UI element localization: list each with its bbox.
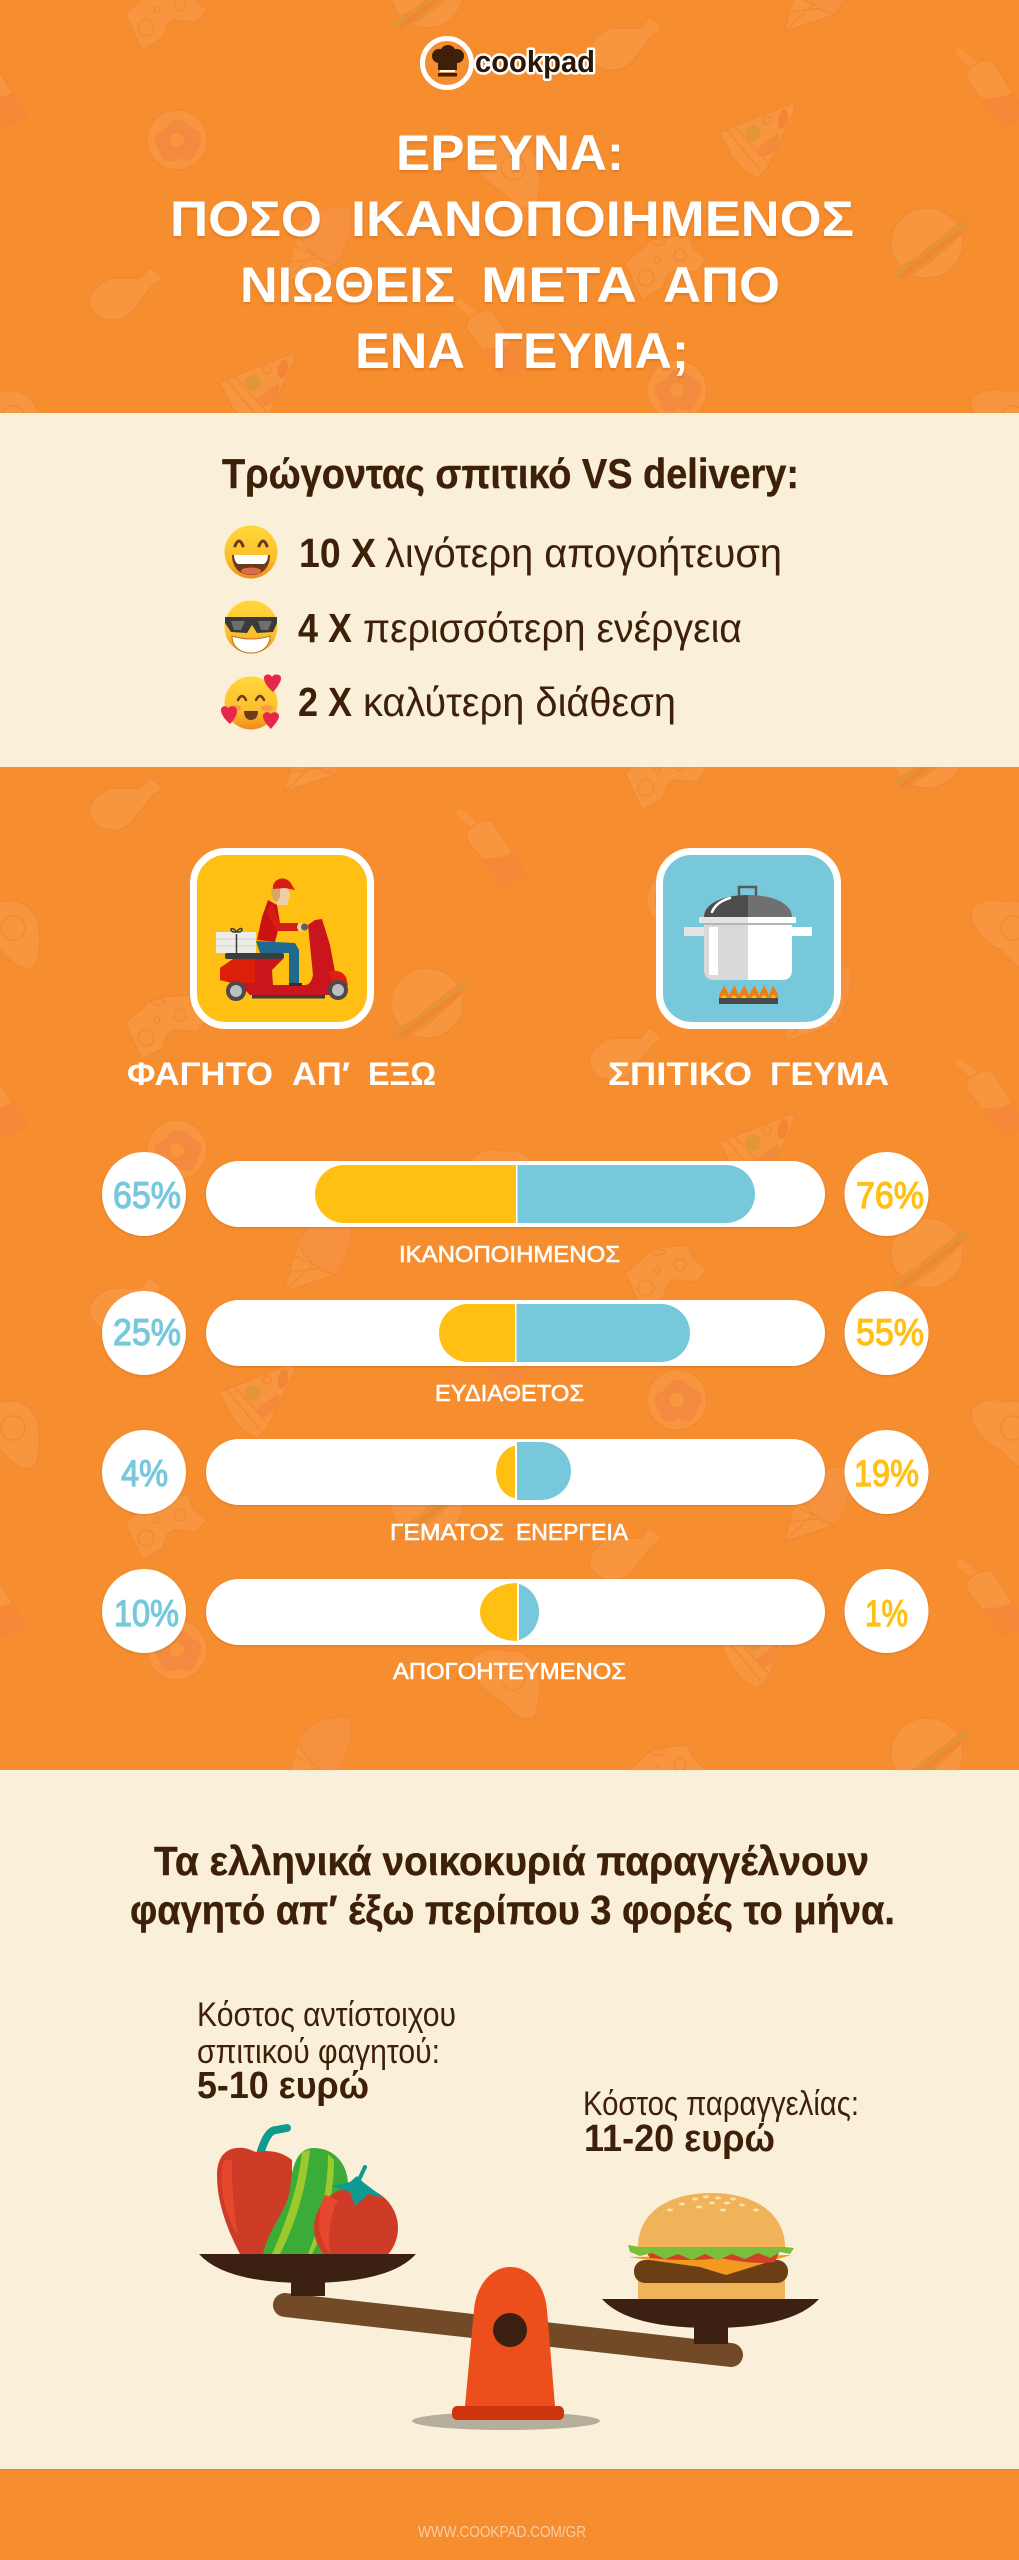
- scale beam: [285, 2305, 731, 2355]
- title: ΝΙΩΘΕΙΣ: [240, 257, 455, 313]
- bar row: in a good mood: 55%: [856, 1312, 924, 1353]
- vegetables: [217, 2128, 398, 2269]
- icon: hearts emoji: [221, 674, 281, 730]
- icon: pot body: [684, 917, 812, 980]
- bar row: full of energy: ΓΕΜΑΤΟΣ: [390, 1519, 504, 1545]
- right pan: [602, 2299, 819, 2344]
- title: ΜΕΤΑ: [481, 257, 637, 313]
- label: delivery food: [127, 1056, 436, 1092]
- title: ΠΟΣΟ: [170, 191, 322, 247]
- label: home meal: ΣΠΙΤΙΚΟ: [608, 1056, 752, 1092]
- icon: sunglasses emoji: [224, 600, 278, 654]
- bar row: full of energy: 19%: [854, 1453, 919, 1494]
- text: home food cost: σπιτικού φαγητού:: [197, 2033, 440, 2071]
- bar row: in a good mood: [102, 1291, 928, 1406]
- stat: more energy: 4 X: [298, 605, 352, 651]
- bar row: disappointed: ΑΠΟΓΟΗΤΕΥΜΕΝΟΣ: [393, 1658, 626, 1684]
- heading: orders per month: Τα ελληνικά νοικοκυριά παραγγέλνουν: [154, 1838, 869, 1884]
- footer url: WWW.COOKPAD.COM/GR: [418, 2524, 586, 2541]
- stat: less disappointment: 10 X: [299, 530, 376, 576]
- icon: chef hat: [432, 45, 464, 76]
- bar row: in a good mood: 25%: [113, 1312, 181, 1353]
- text: order cost: Κόστος παραγγελίας:: [583, 2085, 859, 2123]
- logo wordmark: cookpad: [475, 44, 595, 79]
- bar row: in a good mood: ΕΥΔΙΑΘΕΤΟΣ: [435, 1380, 584, 1406]
- bar row: full of energy: [102, 1430, 928, 1545]
- title: ΓΕΥΜΑ;: [492, 323, 689, 379]
- title: ΕΝΑ: [355, 323, 465, 379]
- stat: less disappointment: λιγότερη απογοήτευση: [385, 530, 782, 576]
- bar row: satisfied: [102, 1152, 928, 1267]
- card: delivery scooter: [194, 852, 370, 1026]
- panel: homemade vs delivery: [0, 413, 1019, 767]
- stat: better mood: 2 X: [298, 679, 352, 725]
- left pan: [199, 2254, 416, 2296]
- logo: cookpad: [422, 38, 595, 88]
- bar row: satisfied: 65%: [113, 1175, 181, 1216]
- text: home food cost: [197, 1996, 456, 2107]
- heading: orders per month: [130, 1838, 895, 1933]
- shadow under scale: [412, 2412, 600, 2430]
- label: home meal: ΓΕΥΜΑ: [770, 1056, 889, 1092]
- bar row: disappointed: [102, 1569, 928, 1684]
- icon: pizza boxes: [216, 929, 256, 953]
- heading: homemade vs delivery: Τρώγοντας σπιτικό VS delivery:: [222, 450, 799, 497]
- icon: scooter: [220, 919, 348, 1001]
- icon: pot lid: [704, 887, 792, 917]
- stat: better mood: καλύτερη διάθεση: [363, 679, 676, 725]
- label: delivery food: ΑΠ′: [292, 1056, 350, 1092]
- title: [170, 125, 854, 379]
- panel: cost comparison: [0, 1770, 1019, 2469]
- label: home meal: [608, 1056, 889, 1092]
- panel: footer: [0, 2469, 1019, 2560]
- icon: rider: [256, 878, 308, 986]
- icon: burner flames: [719, 985, 778, 1004]
- label: delivery food: ΦΑΓΗΤΟ: [127, 1056, 273, 1092]
- bar row: disappointed: 1%: [865, 1593, 908, 1634]
- text: order cost: 11-20 ευρώ: [584, 2118, 775, 2160]
- burger: [628, 2193, 794, 2299]
- text: home food cost: 5-10 ευρώ: [197, 2065, 369, 2107]
- heading: orders per month: φαγητό απ′ έξω περίπου 3 φορές το μήνα.: [130, 1887, 895, 1933]
- icon: grinning emoji: [224, 526, 278, 578]
- bar row: full of energy: ΕΝΕΡΓΕΙΑ: [516, 1519, 629, 1545]
- bar row: full of energy: 4%: [121, 1453, 168, 1494]
- label: delivery food: ΕΞΩ: [368, 1056, 436, 1092]
- bar row: satisfied: ΙΚΑΝΟΠΟΙΗΜΕΝΟΣ: [399, 1241, 620, 1267]
- card: home cooking pot: [660, 852, 838, 1026]
- fulcrum: [452, 2267, 564, 2420]
- bar row: satisfied: 76%: [856, 1175, 924, 1216]
- panel: header: [0, 0, 1019, 413]
- stat: more energy: περισσότερη ενέργεια: [363, 605, 742, 651]
- title: ΙΚΑΝΟΠΟΙΗΜΕΝΟΣ: [351, 191, 854, 247]
- panel: survey comparison: [0, 767, 1019, 1770]
- illustration: balance scale: [199, 2128, 819, 2430]
- title: ΕΡΕΥΝΑ:: [396, 125, 624, 181]
- bar row: disappointed: 10%: [114, 1593, 179, 1634]
- text: order cost: [583, 2085, 859, 2160]
- title: ΑΠΟ: [663, 257, 780, 313]
- text: home food cost: Κόστος αντίστοιχου: [197, 1996, 456, 2034]
